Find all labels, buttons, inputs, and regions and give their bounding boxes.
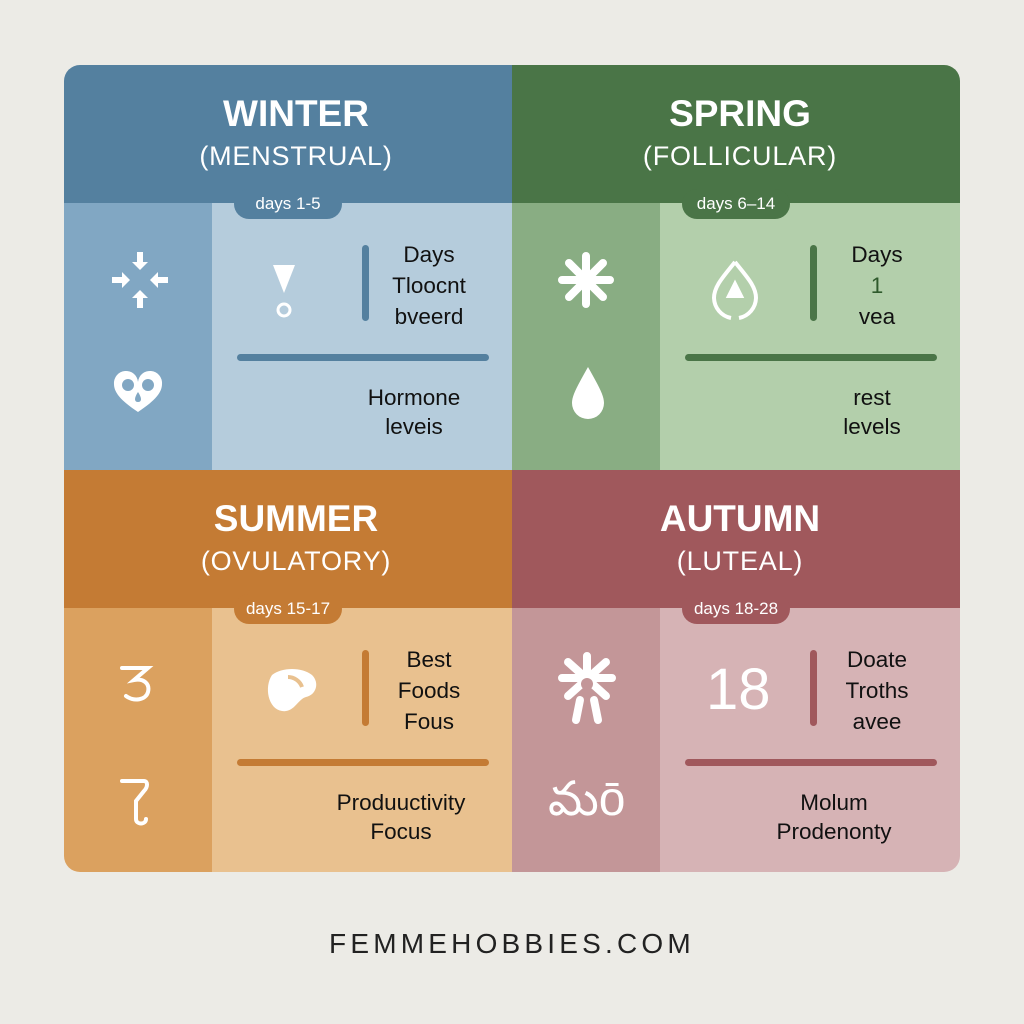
icon: glyph: మō (548, 773, 625, 826)
text: rest levels (843, 385, 901, 439)
icon: drop outline (712, 260, 758, 320)
panel: summer (64, 470, 512, 872)
text: vea (859, 304, 895, 329)
icon: food (268, 669, 316, 712)
bar (810, 245, 817, 321)
text: best foods (398, 647, 460, 734)
panel: autumn (512, 470, 960, 872)
text: molum: Prodenonty (776, 819, 892, 844)
panel: spring (512, 65, 960, 470)
text: rest levels: rest (853, 385, 891, 410)
icon: flower (558, 652, 616, 724)
text: Doate (847, 647, 907, 672)
pill: days 18-28: days 18-28 (694, 599, 778, 618)
text: productivity (337, 790, 466, 844)
text: hormone levels: leveis (385, 414, 443, 439)
text (846, 647, 908, 734)
text: rest levels: levels (843, 414, 901, 439)
icon: heart (114, 371, 162, 412)
text (851, 242, 903, 329)
text: hormone levels: Hormone (368, 385, 460, 410)
heading: summer: SUMMER (214, 498, 378, 539)
pill: days 6-14: days 6–14 (697, 194, 775, 213)
text: molum (776, 790, 892, 844)
panel: winter (64, 65, 512, 470)
text: Troths (846, 678, 908, 703)
text: avee (853, 709, 901, 734)
icon: symbol (120, 666, 154, 702)
text: best foods: Best (406, 647, 452, 672)
pill: days 15-17 (234, 594, 342, 624)
subtitle: follicular: (FOLLICULAR) (643, 141, 837, 171)
text: productivity: Focus (370, 819, 432, 844)
pill: days 15-17: days 15-17 (246, 599, 330, 618)
text: days (392, 242, 466, 329)
icon: drop (273, 265, 295, 318)
icon: hook (120, 779, 149, 826)
text: best foods: Foods (398, 678, 460, 703)
pill: days 18-28 (682, 594, 790, 624)
bar (810, 650, 817, 726)
text: 1 (871, 273, 883, 298)
text: molum: Molum (800, 790, 868, 815)
text: productivity: Produuctivity (337, 790, 465, 815)
icon: star (558, 252, 614, 308)
text: best foods: Fous (404, 709, 454, 734)
text: Days (851, 242, 903, 267)
bar (362, 650, 369, 726)
text: days: bveerd (395, 304, 463, 329)
card (64, 65, 960, 872)
pill: days 6-14 (682, 189, 790, 219)
subtitle: luteal: (LUTEAL) (677, 546, 803, 576)
heading: winter: WINTER (223, 93, 369, 134)
number: 18: 18 (706, 657, 771, 722)
pill: days 1-5 (234, 189, 342, 219)
text: hormone levels (368, 385, 460, 439)
heading: spring: SPRING (669, 93, 811, 134)
bar (362, 245, 369, 321)
pill: days 1-5: days 1-5 (255, 194, 321, 213)
subtitle: ovulatory: (OVULATORY) (201, 546, 391, 576)
heading: autumn: AUTUMN (660, 498, 820, 539)
subtitle: menstrual: (MENSTRUAL) (199, 141, 393, 171)
icon: arrows inward (112, 252, 168, 308)
icon: drop (572, 367, 604, 419)
text: days: Days (403, 242, 455, 267)
footer: FEMMEHOBBIES.COM (329, 928, 695, 959)
text: days: Tloocnt (392, 273, 466, 298)
